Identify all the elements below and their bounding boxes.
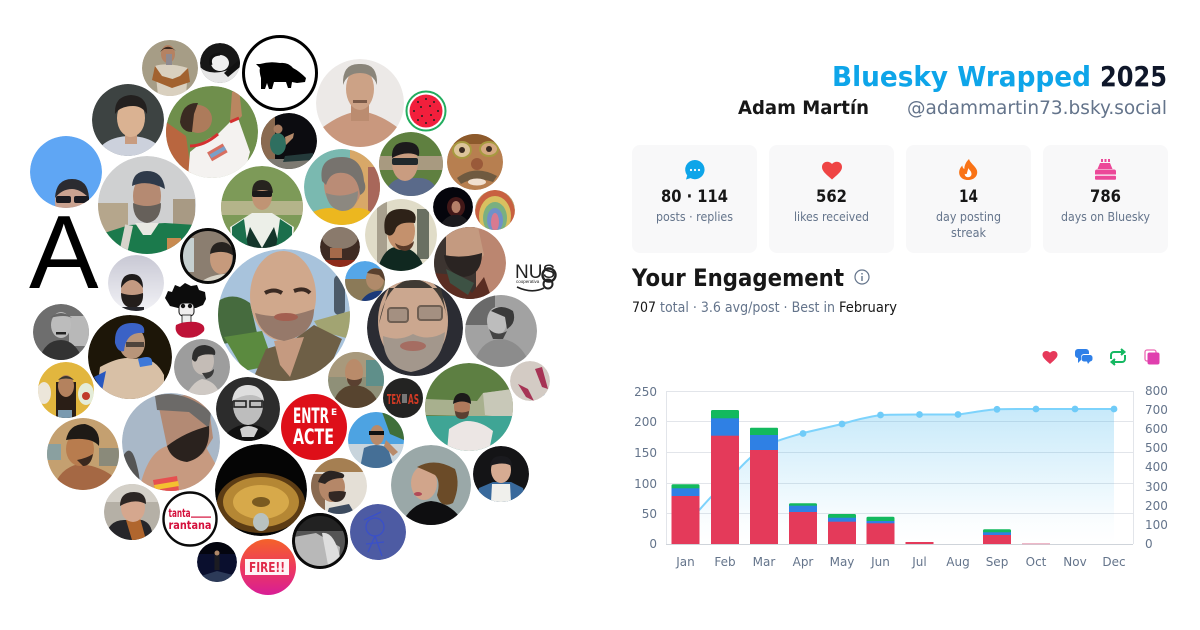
avatar: ENTRACTE: ENTR [293, 404, 329, 428]
month labels: Jan [675, 555, 695, 569]
icon: likes [1042, 351, 1058, 364]
avatar: letter A logo: A [29, 195, 99, 311]
avatar cluster [29, 36, 556, 595]
avatar: small brown scene [320, 225, 360, 267]
icon: reposts [1111, 349, 1125, 365]
cumulative line [686, 409, 1114, 525]
avatar: cyclist in sunglasses [221, 166, 303, 248]
stat value: 562 [816, 187, 847, 207]
avatar: profile with beard [311, 458, 367, 514]
left axis labels: 100 [634, 477, 657, 491]
month labels: Jul [911, 555, 927, 569]
avatar: FIRE!! logo [240, 539, 296, 595]
avatar: ENTRACTE: E [331, 408, 337, 418]
avatar: yellow curtain lucky cats [37, 362, 94, 418]
heading: Your Engagement [631, 264, 844, 292]
stat label: likes received [794, 210, 869, 224]
right axis labels: 600 [1145, 422, 1168, 436]
avatar: bald man olive tee [328, 352, 384, 408]
avatar: grey beard glasses closeup [367, 275, 463, 376]
avatar: b/w embrace [292, 513, 348, 569]
bars: reposts [672, 410, 1011, 533]
right axis labels: 400 [1145, 460, 1168, 474]
avatar: grey-haired man yellow shirt [304, 149, 380, 225]
stat label: days on Bluesky [1061, 210, 1150, 224]
avatar: red shoes [510, 361, 550, 401]
stat cards [632, 145, 1168, 253]
month labels: Oct [1026, 555, 1047, 569]
right axis labels: 800 [1145, 384, 1168, 398]
avatar: beard with brick wall [434, 227, 506, 299]
gridlines [666, 391, 1134, 544]
avatar: blue sky with face at bottom [30, 136, 102, 208]
stat value: 14 [959, 187, 978, 207]
handle: @adammartin73.bsky.social [907, 97, 1167, 119]
left axis labels: 200 [634, 415, 657, 429]
right axis labels: 200 [1145, 499, 1168, 513]
chart legend [1042, 349, 1160, 365]
bars: replies [672, 418, 1011, 535]
avatar: blue-lit man [88, 315, 172, 399]
month labels: Sep [986, 555, 1008, 569]
avatar: woman dark bg [433, 187, 473, 227]
avatar: FIRE!! logo: FIRE!! [249, 561, 285, 576]
right axis labels: 100 [1145, 518, 1168, 532]
month labels: Aug [946, 555, 970, 569]
avatar: NUS cooperativa logo: cooperativa [516, 279, 540, 284]
avatar: rainbow tee man [166, 86, 258, 182]
icon: speech bubble [685, 160, 705, 180]
avatar: TEXAS: AS [408, 393, 419, 408]
stat label: day posting [936, 210, 1001, 224]
left axis labels: 0 [649, 537, 657, 551]
month labels: Apr [793, 555, 813, 569]
title: year: 2025 [1100, 60, 1167, 93]
avatar: black ringed portrait [180, 228, 236, 284]
month labels: May [830, 555, 854, 569]
summary: total: 707 [632, 300, 656, 316]
icon: info [855, 270, 869, 284]
avatar: afro cartoon [165, 283, 206, 338]
avatar: bearded man on pale bg [108, 255, 164, 313]
left axis labels [634, 385, 657, 551]
header [738, 60, 1167, 119]
avatar: watermelon [406, 92, 446, 130]
avatar: golden dome [215, 444, 307, 536]
avatar: sunglasses selfie [379, 132, 443, 196]
right axis labels: 500 [1145, 441, 1168, 455]
month labels: Feb [714, 555, 736, 569]
avatar: glasses man, dark green jacket [365, 199, 437, 271]
avatar: man at coastal cliff [425, 363, 513, 451]
card: posts and replies [632, 145, 757, 253]
month labels: Nov [1063, 555, 1087, 569]
avatar: b/w man looking sideways [465, 295, 537, 367]
avatar: tantarantana logo [164, 492, 216, 546]
avatar: main large selfie [218, 249, 350, 381]
avatar: rainbow painting [475, 190, 515, 230]
avatar: man in blue blazer [473, 446, 529, 502]
icon: flame [959, 159, 977, 180]
month labels: Mar [753, 555, 775, 569]
avatar: ENTRACTE: ACTE [293, 425, 334, 449]
avatar: beach man striped shirt [348, 412, 404, 468]
left axis labels: 250 [634, 385, 657, 399]
avatar: young man scarf [104, 484, 160, 540]
month labels: Dec [1102, 555, 1126, 569]
avatar: blue sketch [350, 504, 406, 560]
stat value: 80 · 114 [661, 187, 728, 207]
avatar: TEXAS [383, 378, 423, 418]
avatar: shirtless man orange window [47, 418, 119, 490]
avatar: letter A logo: A [93, 281, 99, 290]
icon: quotes [1145, 350, 1160, 364]
month labels: Jun [870, 555, 890, 569]
avatar: bearded man rainbow [122, 393, 220, 491]
avatar: small stage figure [197, 542, 237, 582]
avatar: green jersey selfie [98, 156, 196, 254]
right axis labels: 300 [1145, 480, 1168, 494]
avatar: mirror selfie [142, 40, 198, 96]
display name: Adam Martín [738, 97, 869, 119]
chart: monthly engagement and cumulative line [634, 384, 1168, 569]
avatar: b/w man with glasses [216, 377, 280, 441]
avatar: yellow glasses closeup [447, 134, 503, 190]
avatar: tantarantana logo: tanta [168, 506, 190, 520]
left axis labels: 150 [634, 446, 657, 460]
right axis labels: 700 [1145, 403, 1168, 417]
card: days on Bluesky [1043, 145, 1168, 253]
summary: averages: total · 3.6 avg/post · Best in [660, 300, 835, 316]
avatar: cartoon sleeper [200, 43, 240, 83]
icon: heart [822, 162, 842, 180]
avatar: curly-haired woman [391, 445, 471, 525]
cumulative area [686, 409, 1114, 544]
left axis labels: 50 [642, 507, 657, 521]
icon: replies [1075, 349, 1092, 364]
right axis labels: 0 [1145, 537, 1153, 551]
avatar: dark-haired smiling man [92, 84, 164, 156]
avatar: TEXAS: TEX [387, 393, 401, 408]
card: streak [906, 145, 1031, 253]
avatar: profile against sky [345, 261, 385, 301]
icon: cake [1095, 159, 1116, 180]
summary: best month: February [839, 300, 897, 316]
stat label: posts · replies [656, 210, 733, 224]
bars: likes [672, 436, 1050, 544]
avatar: man on stage [261, 113, 317, 169]
stat value: 786 [1090, 187, 1121, 207]
line points [800, 406, 1117, 437]
card: likes [769, 145, 894, 253]
avatar: ENTRACTE [281, 394, 347, 460]
month labels [675, 555, 1126, 569]
avatar: NUS cooperativa logo: NUS [515, 262, 555, 283]
avatar: pig logo [244, 36, 316, 110]
avatar: illustrated man [316, 59, 404, 147]
avatar: grey profile [174, 339, 230, 395]
engagement heading [631, 264, 897, 316]
title: Bluesky Wrapped: Bluesky Wrapped [832, 60, 1091, 93]
right axis labels [1145, 384, 1168, 551]
stat label line 2: streak [951, 226, 986, 240]
avatar: b/w moustache [33, 304, 89, 360]
avatar: tantarantana logo: rantana [168, 518, 212, 532]
